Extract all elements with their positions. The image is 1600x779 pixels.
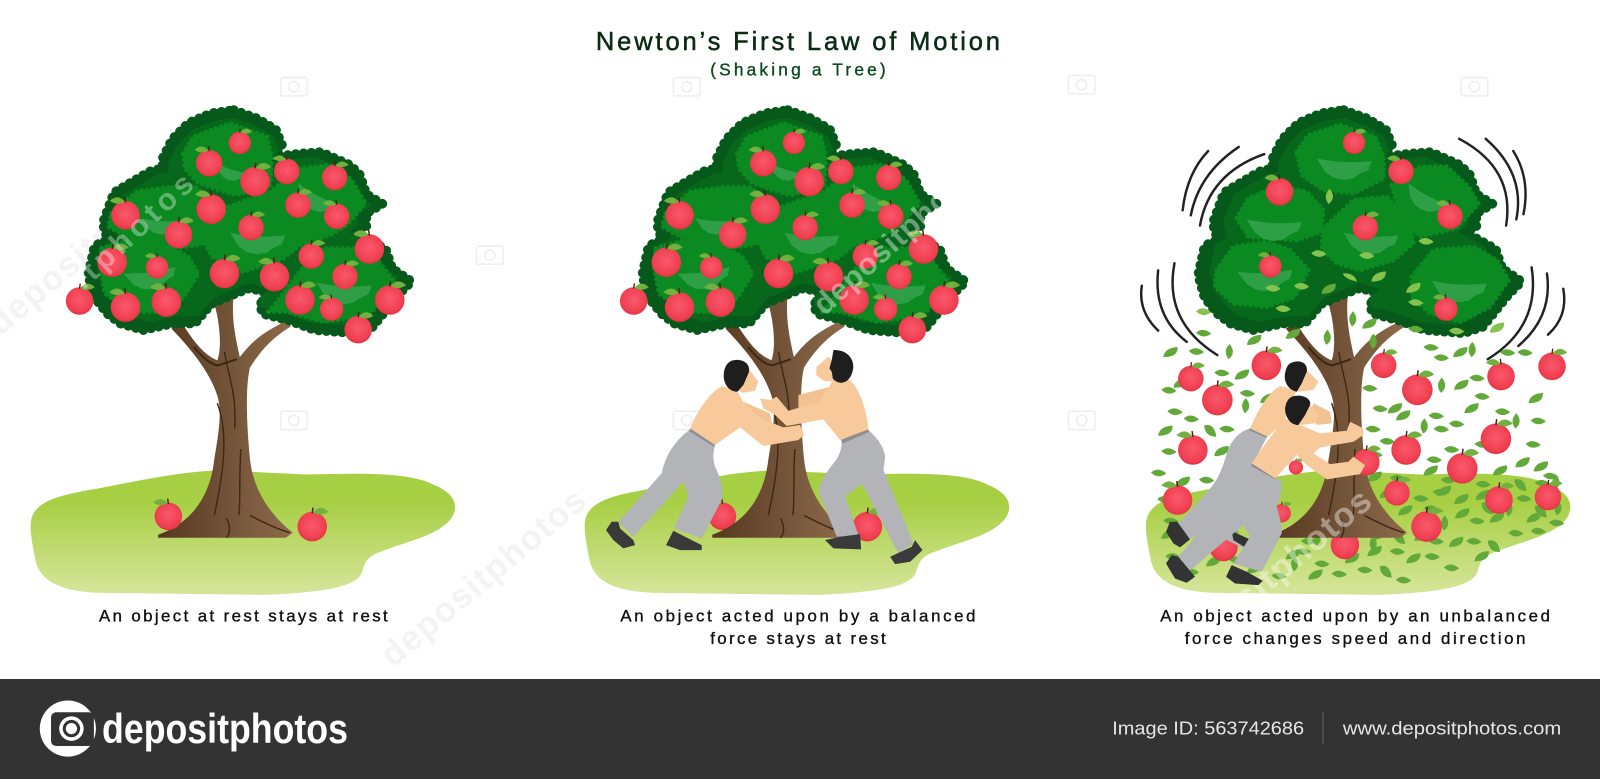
tree trunk	[1272, 288, 1407, 538]
ground	[31, 470, 455, 595]
divider	[1322, 712, 1323, 744]
panel: unbalanced force	[1141, 110, 1570, 675]
tree watermark: depositphotos	[806, 149, 992, 322]
ground	[585, 470, 1009, 595]
footer bar	[0, 679, 1600, 779]
apples on tree	[620, 128, 960, 343]
panel: object at rest	[31, 110, 455, 625]
scene watermark: depositphotos	[1159, 481, 1379, 675]
logo icon: camera	[40, 701, 96, 757]
site url: www.depositphotos.com	[1342, 718, 1561, 739]
falling leaves	[1151, 284, 1548, 476]
tree canopy	[642, 110, 966, 333]
subtitle: (Shaking a Tree)	[710, 60, 886, 80]
tree trunk	[158, 288, 293, 538]
panel: balanced force	[585, 110, 1009, 648]
image id: Image ID: 563742686	[1112, 718, 1304, 739]
caption: force changes speed and direction	[1185, 629, 1526, 648]
apples on tree	[66, 128, 406, 343]
watermark layer: depositphotos	[374, 481, 593, 675]
fallen apples	[707, 499, 884, 541]
fallen apples on ground	[1161, 449, 1563, 561]
tree trunk	[712, 288, 847, 538]
man pushing from right	[760, 350, 922, 564]
logo wordmark: depositphotos	[102, 705, 348, 752]
caption: An object acted upon by an unbalanced	[1160, 606, 1550, 625]
caption	[1160, 606, 1550, 648]
tree canopy	[88, 110, 412, 333]
caption: An object acted upon by a balanced	[620, 606, 976, 625]
shake motion arcs	[1141, 139, 1564, 359]
falling apples	[1177, 346, 1567, 476]
back man pushing	[1166, 361, 1332, 548]
caption: An object at rest stays at rest	[99, 606, 388, 625]
fallen leaves on ground	[1157, 465, 1564, 583]
leaves on canopy	[1196, 189, 1504, 334]
watermark layer	[0, 76, 1488, 675]
remaining apples on tree	[1258, 128, 1463, 321]
tree canopy	[1198, 110, 1522, 333]
caption	[620, 606, 976, 648]
tree watermark: itphotos	[65, 167, 200, 296]
fallen apples	[153, 499, 329, 541]
ground	[1146, 470, 1570, 595]
man pushing from left	[606, 360, 804, 550]
front man pushing	[1166, 396, 1365, 585]
caption: force stays at rest	[710, 629, 886, 648]
title: Newton’s First Law of Motion	[596, 28, 1000, 56]
